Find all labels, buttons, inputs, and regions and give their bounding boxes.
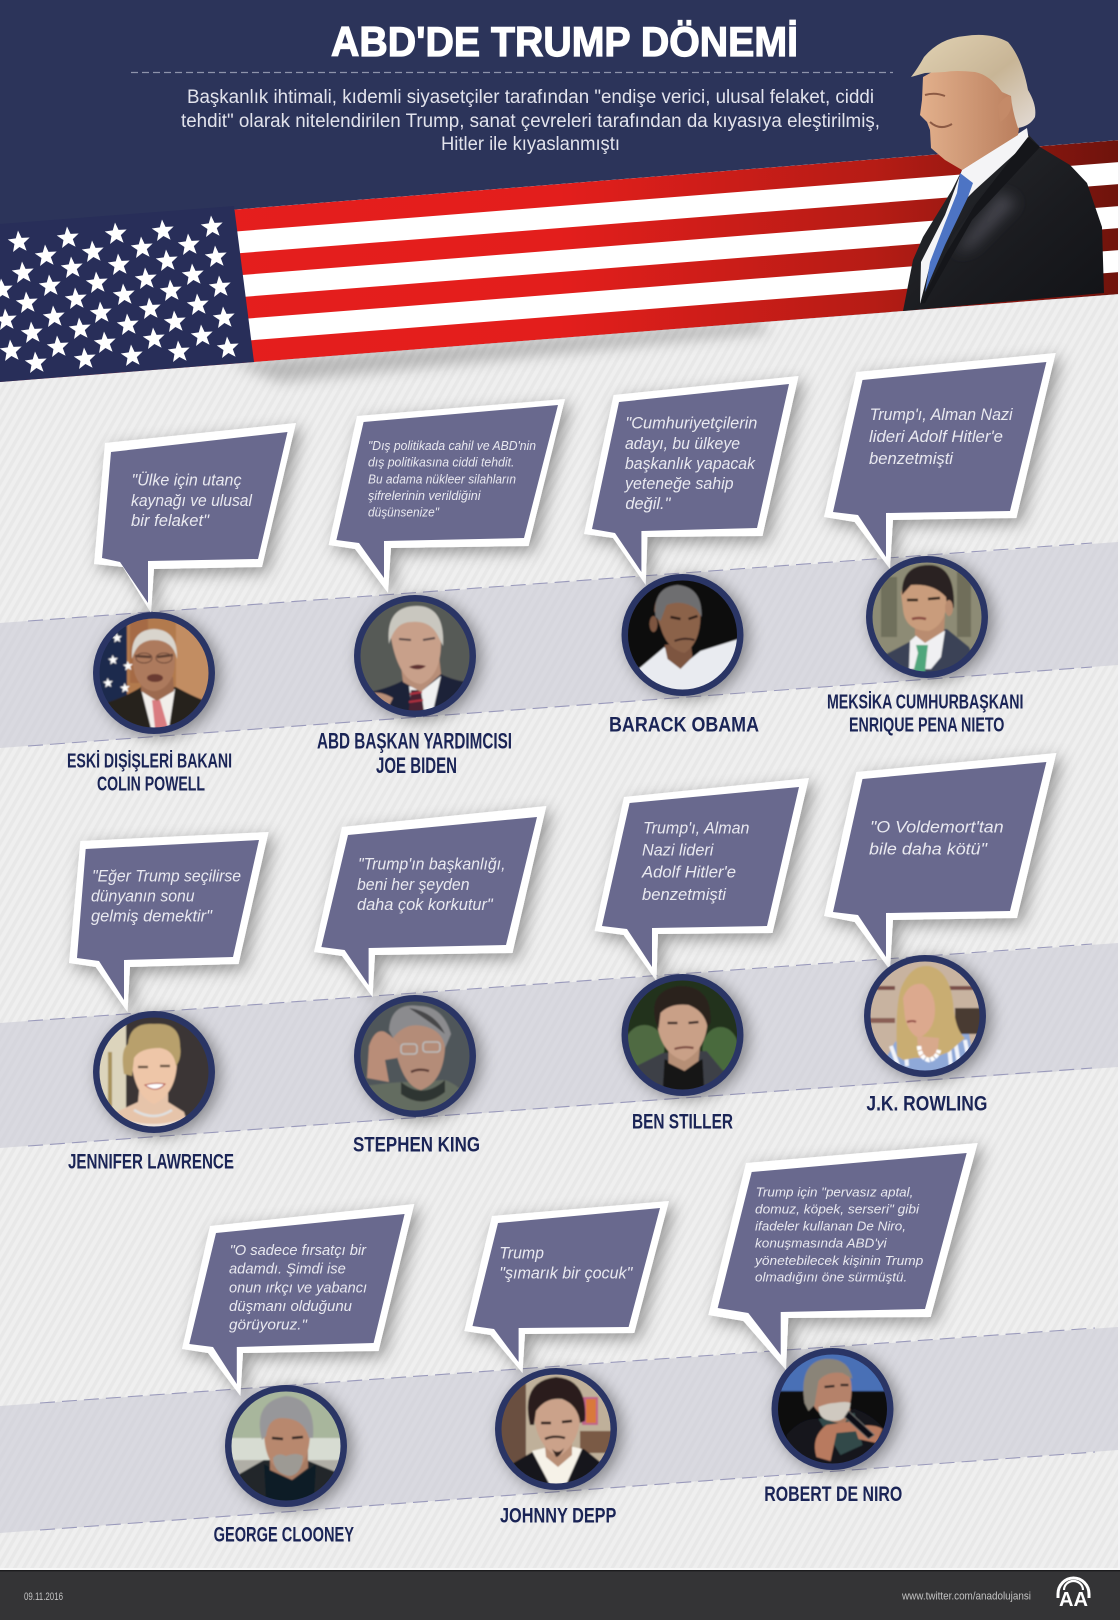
speech bubble bbox=[94, 423, 296, 613]
portrait bbox=[772, 1348, 894, 1470]
quote text: bile daha kötü" bbox=[869, 839, 988, 858]
portrait bbox=[93, 612, 216, 734]
portrait bbox=[864, 955, 986, 1077]
quote text: Bu adama nükleer silahların bbox=[368, 471, 516, 486]
portrait bbox=[622, 574, 744, 696]
quote text: "O Voldemort'tan bbox=[870, 818, 1004, 837]
source url: www.twitter.com/anadolujansi bbox=[901, 1590, 1031, 1602]
name: GEORGE CLOONEY bbox=[214, 1524, 354, 1547]
name: JOE BIDEN bbox=[376, 753, 457, 778]
name: BEN STILLER bbox=[632, 1110, 733, 1133]
quote text: onun ırkçı ve yabancı bbox=[229, 1279, 367, 1296]
quote text: daha çok korkutur" bbox=[357, 895, 494, 914]
diagonal band 2 bbox=[0, 943, 1118, 1148]
intro text bbox=[181, 87, 880, 155]
quote text: domuz, köpek, serseri" gibi bbox=[755, 1201, 920, 1216]
name bbox=[317, 728, 512, 778]
portrait bbox=[354, 995, 476, 1117]
speech bubble bbox=[824, 353, 1056, 569]
quote card: Johnny Depp bbox=[464, 1201, 669, 1527]
quote card: Colin Powell bbox=[67, 423, 296, 796]
name: STEPHEN KING bbox=[353, 1134, 480, 1157]
quote card: Stephen King bbox=[314, 806, 546, 1157]
speech bubble bbox=[464, 1201, 669, 1373]
quote text: "Eğer Trump seçilirse bbox=[92, 867, 241, 886]
flag canton with stars bbox=[0, 206, 254, 382]
divider bbox=[131, 72, 893, 74]
intro text: tehdit" olarak nitelendirilen Trump, sanat çevreleri tarafından da kıyasıya eleştirilmiş, bbox=[181, 111, 880, 132]
quote text: konuşmasında ABD'yi bbox=[755, 1236, 888, 1251]
intro text: Hitler ile kıyaslanmıştı bbox=[441, 134, 620, 155]
quote text bbox=[624, 413, 757, 513]
quote text bbox=[91, 867, 241, 926]
name: MEKSİKA CUMHURBAŞKANI bbox=[827, 690, 1023, 713]
quote text: "Ülke için utanç bbox=[132, 471, 242, 490]
portrait: Donald Trump bbox=[903, 35, 1104, 311]
quote text: beni her şeyden bbox=[357, 875, 470, 894]
speech bubble bbox=[824, 753, 1056, 970]
quote text: şifrelerinin verildiğini bbox=[368, 488, 482, 503]
speech bubble bbox=[329, 399, 565, 593]
quote card: Enrique Pena Nieto bbox=[824, 353, 1056, 737]
quote text: "Cumhuriyetçilerin bbox=[625, 413, 757, 432]
quote card: George Clooney bbox=[182, 1204, 414, 1547]
quote text: düşmanı olduğunu bbox=[229, 1298, 353, 1315]
quote text: olmadığını öne sürmüştü. bbox=[755, 1270, 907, 1285]
speech bubble bbox=[584, 376, 799, 585]
name: ROBERT DE NIRO bbox=[764, 1483, 902, 1506]
quote text: bir felaket" bbox=[131, 511, 210, 530]
American flag bbox=[0, 130, 1120, 390]
icon: Anadolu Agency logo bbox=[1058, 1578, 1089, 1611]
name: JENNIFER LAWRENCE bbox=[68, 1150, 234, 1173]
title: ABD'DE TRUMP DÖNEMİ bbox=[331, 18, 798, 65]
quote card: Ben Stiller bbox=[595, 778, 809, 1133]
quote text: düşünsenize" bbox=[368, 505, 440, 520]
name bbox=[67, 750, 232, 796]
footer bar bbox=[0, 1568, 1120, 1620]
quote text bbox=[499, 1243, 633, 1282]
page edge bbox=[1118, 0, 1120, 1568]
quote text bbox=[229, 1242, 367, 1333]
portrait bbox=[225, 1385, 347, 1507]
quote text bbox=[869, 405, 1014, 468]
quote text: görüyoruz." bbox=[229, 1316, 308, 1333]
quote text bbox=[869, 818, 1004, 858]
quote text: "O sadece fırsatçı bir bbox=[230, 1242, 367, 1259]
quote text: gelmiş demektir" bbox=[91, 907, 213, 926]
quote text: Trump'ı, Alman Nazi bbox=[870, 405, 1014, 424]
quote card: J.K. Rowling bbox=[824, 753, 1056, 1116]
name: ABD BAŞKAN YARDIMCISI bbox=[317, 728, 512, 753]
portrait bbox=[622, 974, 744, 1096]
speech bubble bbox=[314, 806, 546, 997]
quote text: "Trump'ın başkanlığı, bbox=[358, 854, 506, 873]
quote text bbox=[641, 818, 749, 904]
quote text: lideri Adolf Hitler'e bbox=[869, 427, 1003, 446]
quote card: Joe Biden bbox=[317, 399, 565, 778]
name: J.K. ROWLING bbox=[866, 1093, 987, 1116]
quote text bbox=[357, 854, 506, 914]
flag shadow bbox=[230, 320, 770, 382]
diagonal band 3 bbox=[0, 1327, 1118, 1533]
speech bubble bbox=[69, 832, 269, 1012]
quote text: Trump bbox=[499, 1243, 544, 1262]
name: ESKİ DIŞİŞLERİ BAKANI bbox=[67, 750, 232, 773]
quote text: adayı, bu ülkeye bbox=[625, 434, 740, 453]
quote text: dünyanın sonu bbox=[91, 887, 195, 906]
quote card: Jennifer Lawrence bbox=[68, 832, 269, 1173]
header background bbox=[0, 0, 1120, 400]
quote text: adamdı. Şimdi ise bbox=[229, 1260, 346, 1277]
quote text bbox=[131, 471, 253, 530]
quote text: kaynağı ve ulusal bbox=[131, 491, 253, 510]
quote text: dış politikasına ciddi tehdit. bbox=[368, 455, 514, 470]
quote text: başkanlık yapacak bbox=[625, 454, 756, 473]
quote card: Barack Obama bbox=[584, 376, 799, 737]
quote text: benzetmişti bbox=[642, 885, 727, 904]
quote text: "Dış politikada cahil ve ABD'nin bbox=[368, 438, 536, 453]
quote text: Nazi lideri bbox=[642, 841, 715, 860]
striped page background bbox=[0, 294, 1120, 1570]
speech bubble bbox=[595, 778, 809, 981]
portrait bbox=[354, 595, 476, 717]
quote text: ifadeler kullanan De Niro, bbox=[755, 1219, 906, 1234]
quote text: değil." bbox=[625, 494, 671, 513]
speech bubble bbox=[708, 1143, 978, 1370]
diagonal band 1 bbox=[0, 542, 1118, 748]
quote text: yeteneğe sahip bbox=[624, 474, 734, 493]
intro text: Başkanlık ihtimali, kıdemli siyasetçiler tarafından "endişe verici, ulusal felaket, ciddi bbox=[187, 87, 874, 108]
quote text: benzetmişti bbox=[869, 449, 954, 468]
portrait bbox=[495, 1368, 617, 1490]
name: BARACK OBAMA bbox=[609, 714, 759, 737]
name: ENRIQUE PENA NIETO bbox=[849, 715, 1004, 737]
date: 09.11.2016 bbox=[24, 1591, 63, 1603]
quote text: "şımarık bir çocuk" bbox=[499, 1263, 633, 1282]
quote text: Adolf Hitler'e bbox=[641, 863, 736, 882]
quote text bbox=[754, 1185, 923, 1285]
quote text bbox=[368, 438, 536, 520]
quote text: Trump için "pervasız aptal, bbox=[756, 1185, 913, 1200]
name bbox=[827, 690, 1023, 737]
quote text: yönetebilecek kişinin Trump bbox=[754, 1253, 923, 1268]
name: JOHNNY DEPP bbox=[500, 1504, 616, 1527]
portrait bbox=[866, 556, 988, 678]
quote text: Trump'ı, Alman bbox=[643, 818, 749, 837]
name: COLIN POWELL bbox=[97, 774, 205, 796]
icon: Anadolu Agency logo: AA bbox=[1059, 1589, 1088, 1611]
portrait bbox=[93, 1011, 215, 1133]
speech bubble bbox=[182, 1204, 414, 1396]
quote card: Robert De Niro bbox=[708, 1143, 978, 1506]
